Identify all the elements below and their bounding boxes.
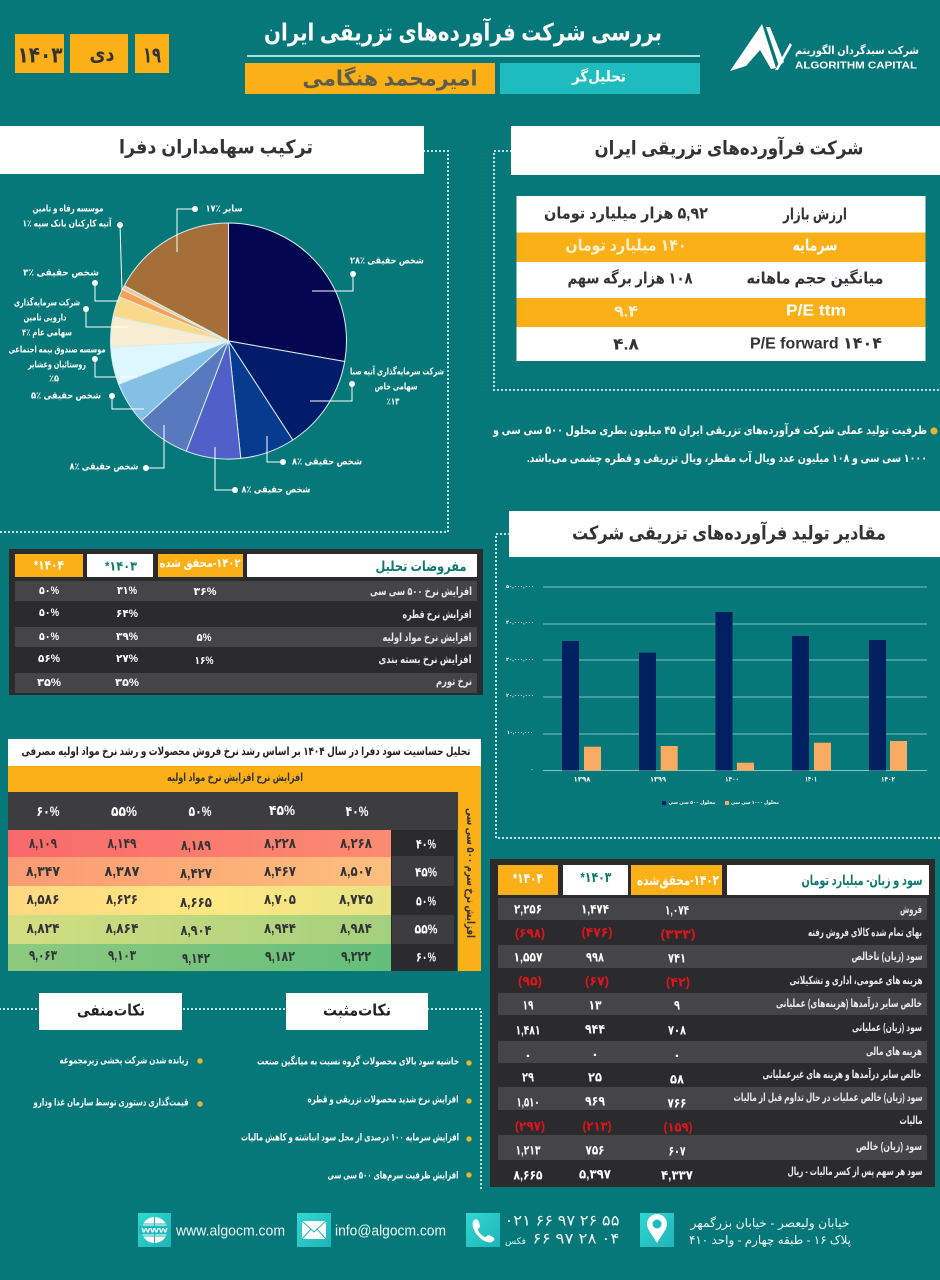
heat values: ۸,۳۴۷ (26, 863, 60, 879)
row: 500cc rate: ۳۱% (117, 585, 137, 597)
pie labels: شرکت سرمایه‌گذاری (14, 296, 80, 308)
row: other operating: ۱۳ (588, 998, 602, 1012)
row: finance costs: ۰ (591, 1046, 599, 1062)
bars: 1000cc solution (584, 741, 907, 770)
row: drops rate: ۶۴% (116, 608, 138, 620)
row: raw material rate: افزایش نرخ مواد اولیه (382, 632, 472, 644)
panel: company key figures: میانگین حجم ماهانه (746, 268, 884, 288)
row: raw material rate: ۳۹% (116, 631, 138, 643)
analyst name bar: تحلیل‌گر (571, 68, 626, 86)
heat values: ۸,۷۴۵ (339, 891, 373, 907)
heat values: ۸,۹۸۴ (340, 920, 372, 936)
heat values: ۸,۶۶۵ (180, 894, 212, 910)
panel: company key figures: P/E forward ۱۴۰۴ (750, 336, 882, 352)
panel: company key figures: ۱۰۸ هزار برگه سهم (568, 268, 693, 288)
row: finance costs: ۰ (673, 1048, 681, 1062)
footer: phone: ۶۶ ۹۷ ۲۸ ۰۴ (532, 1230, 620, 1248)
table: profit and loss: ۱۴۰۲-محقق‌شده (637, 872, 719, 889)
row: other non-operating: ۲۵ (588, 1070, 602, 1084)
panel: positive points: نکات‌مثبت (323, 1002, 391, 1020)
text block: production capacity: ۱۰۰۰ سی سی و ۱۰۸ میلیون عدد ویال آب مقطر، ویال تزریقی و قطره چشمی می‌باشد. (527, 451, 927, 466)
panel: company key figures: P/E ttm (786, 302, 846, 320)
row: cost of goods sold (515, 924, 922, 942)
row: tax: (۲۹۷) (515, 1118, 545, 1134)
row: earnings per share: ۸,۶۶۵ (514, 1168, 543, 1182)
row: earnings per share: ۴,۳۳۷ (661, 1168, 693, 1182)
footer: website: www.algocm.com (175, 1222, 285, 1240)
x axis labels: ۱۳۹۸ (574, 776, 591, 784)
footer: address: پلاک ۱۶ - طبقه چهارم - واحد ۴۱۰ (689, 1233, 851, 1248)
logo: ALGORITHM CAPITAL (795, 60, 917, 72)
table: profit and loss: *۱۴۰۳ (580, 869, 612, 885)
analyst name bar (245, 63, 700, 94)
table: sensitivity analysis (8, 739, 481, 971)
row: tax: (۱۵۹) (664, 1120, 692, 1134)
row: other non-operating (522, 1067, 922, 1086)
row: operating profit (516, 1022, 922, 1038)
legend (662, 800, 779, 806)
column headers: ۴۰% (346, 803, 369, 819)
row: gross profit: ۷۴۱ (668, 950, 686, 966)
row: other non-operating: ۵۸ (670, 1072, 684, 1086)
panel: positive points: حاشیه سود بالای محصولات گروه نسبت به میانگین صنعت (257, 1054, 459, 1068)
footer: phone: ۰۲۱ ۶۶ ۹۷ ۲۶ ۵۵ (504, 1212, 620, 1230)
row headers: ۴۵% (415, 864, 437, 880)
y axis labels: ۰ (530, 767, 534, 773)
x axis labels (574, 776, 896, 784)
row: drops rate: افزایش نرخ قطره (402, 609, 472, 621)
pie leader lines (83, 206, 356, 493)
heat values: ۸,۱۸۹ (181, 837, 211, 853)
heat values: ۸,۸۲۴ (26, 920, 60, 936)
row: cost of goods sold: (۳۳۳) (660, 926, 696, 942)
footer: phone (466, 1212, 620, 1248)
row: profit before tax: ۹۶۹ (585, 1094, 605, 1108)
column headers: ۵۵% (111, 803, 137, 819)
row: other operating (522, 996, 922, 1012)
legend: محلول ۵۰۰ سی سی (668, 800, 716, 806)
footer: address (640, 1213, 851, 1248)
row: net profit: ۱,۲۱۳ (516, 1142, 541, 1158)
heat values: ۹,۱۰۳ (108, 947, 136, 963)
heat values: ۹,۲۲۲ (341, 948, 371, 964)
row headers: ۴۰% (416, 836, 436, 852)
pie labels: شرکت سرمایه‌گذاری آتیه صبا (350, 364, 444, 378)
heat values: ۸,۱۴۹ (108, 835, 137, 851)
x axis labels: ۱۴۰۲ (881, 776, 896, 784)
heading: production chart (509, 511, 940, 557)
pie labels: سهامی عام ٪۴ (22, 328, 72, 338)
row: raw material rate: ۵% (196, 632, 212, 644)
row: packaging rate: افزایش نرخ بسته بندی (378, 654, 472, 666)
row: sales: فروش (900, 904, 922, 916)
date boxes: ۱۴۰۳ (18, 42, 63, 68)
row headers: ۵۰% (416, 894, 436, 908)
table: analysis assumptions: *۱۴۰۴ (34, 558, 64, 572)
heat values: ۸,۱۰۹ (29, 835, 57, 851)
text block: production capacity (492, 423, 938, 466)
row: tax (515, 1115, 922, 1134)
y axis labels: ۱۰,۰۰۰,۰۰۰ (507, 730, 533, 736)
row: tax: (۲۱۳) (582, 1118, 612, 1134)
heading: production chart: مقادیر تولید فرآورده‌های تزریقی شرکت (572, 520, 886, 544)
row: 500cc rate (39, 585, 472, 598)
panel: company key figures: ۵,۹۲ هزار میلیارد تومان (544, 206, 708, 222)
row: tax: مالیات (900, 1115, 922, 1127)
panel: negative points (33, 993, 203, 1108)
y axis labels: ۲۰,۰۰۰,۰۰۰ (506, 693, 534, 699)
row: 500cc rate: ۳۶% (194, 586, 217, 598)
table: analysis assumptions (9, 549, 483, 695)
row: raw material rate: ۵۰% (39, 631, 59, 643)
pie labels: ٪۱۳ (386, 396, 400, 408)
pie labels (8, 204, 444, 496)
row: packaging rate: ۲۷% (116, 653, 138, 665)
row: cost of goods sold: (۶۹۸) (515, 926, 545, 940)
heat values: ۸,۴۶۷ (264, 863, 296, 879)
pie labels: شخص حقیقی ٪۵ (31, 390, 101, 402)
row: finance costs (524, 1046, 922, 1062)
table: analysis assumptions: *۱۴۰۳ (105, 558, 137, 574)
row: earnings per share: ۵,۳۹۷ (579, 1166, 611, 1182)
row: earnings per share (514, 1166, 922, 1182)
footer: website (138, 1213, 285, 1247)
y axis labels (506, 584, 534, 773)
panel: company key figures: ۴.۸ (613, 336, 639, 354)
row: 500cc rate: افزایش نرخ ۵۰۰ سی سی (370, 586, 472, 598)
column headers: ۵۰% (188, 803, 212, 819)
panel: company key figures: ۹.۴ (614, 304, 638, 320)
heat values: ۸,۴۲۷ (180, 865, 212, 881)
pie labels: موسسه رفاه و تامین (32, 204, 104, 214)
footer: phone: فکس (505, 1236, 526, 1246)
panel: positive points (241, 993, 472, 1182)
column headers: ۶۰% (36, 803, 60, 819)
legend: محلول ۱۰۰۰ سی سی (731, 800, 779, 806)
row headers: ۵۵% (414, 922, 438, 936)
row: packaging rate: ۵۶% (38, 653, 60, 665)
heat values (26, 835, 373, 966)
pie labels: دارویی تامین (24, 312, 67, 324)
heat values: ۸,۲۲۸ (264, 835, 296, 851)
footer: email: info@algocm.com (335, 1222, 446, 1240)
panel: positive points: افزایش نرخ شدید محصولات تزریقی و قطره (308, 1094, 458, 1106)
footer: website: www (140, 1226, 169, 1234)
bar chart: production (506, 584, 927, 806)
table: analysis assumptions: مفروضات تحلیل (376, 558, 466, 575)
heat values: ۸,۳۸۷ (104, 863, 140, 879)
pie labels: شخص حقیقی ٪۳ (23, 268, 99, 278)
x axis labels: ۱۴۰۰ (725, 776, 739, 784)
pie labels: سهامی خاص (374, 382, 418, 392)
row: net profit (516, 1141, 922, 1158)
panel: company key figures (516, 196, 926, 361)
heat values: ۹,۱۴۲ (182, 950, 210, 966)
column headers (36, 802, 369, 819)
row: net profit: ۶۰۷ (668, 1144, 686, 1158)
row: finance costs: ۰ (524, 1048, 532, 1062)
heat values: ۸,۹۰۴ (180, 922, 212, 938)
row: inflation (37, 676, 472, 689)
row: raw material rate (39, 631, 472, 644)
panel: positive points: افزایش ظرفیت سرم‌های ۵۰۰ سی سی (328, 1170, 458, 1182)
table: analysis assumptions: ۱۴۰۲-محقق شده (160, 556, 241, 570)
row: sales (514, 902, 922, 918)
row: sales: ۱,۰۷۴ (665, 902, 689, 918)
row: profit before tax: ۷۶۶ (668, 1096, 686, 1110)
heading: shareholders (0, 126, 424, 174)
row: profit before tax (516, 1092, 922, 1110)
row: profit before tax: ۱,۵۱۰ (516, 1094, 540, 1110)
pie labels: شخص حقیقی ٪۲۸ (350, 256, 424, 266)
row: 500cc rate: ۵۰% (39, 585, 59, 597)
footer: address: خیابان ولیعصر - خیابان بزرگمهر (689, 1216, 850, 1231)
pie labels: شخص حقیقی ٪۸ (292, 456, 362, 468)
table: sensitivity analysis: تحلیل حساسیت سود دفرا در سال ۱۴۰۴ بر اساس رشد نرخ فروش محصولات و رشد نرخ مواد اولیه مصرفی (22, 746, 471, 759)
row: inflation: ۳۵% (37, 677, 61, 689)
row: sales: ۱,۴۷۴ (581, 902, 609, 916)
row: packaging rate: ۱۶% (194, 655, 214, 667)
heat values: ۸,۶۲۶ (106, 891, 138, 907)
heat values: ۹,۱۸۲ (265, 948, 295, 964)
heading: company: شرکت فرآورده‌های تزریقی ایران (594, 136, 864, 160)
row: gross profit: ۱,۵۵۷ (514, 950, 543, 964)
title: بررسی شرکت فرآورده‌های تزریقی ایران (264, 18, 662, 46)
row: other operating: ۱۹ (522, 998, 534, 1012)
y axis labels: ۵۰,۰۰۰,۰۰۰ (506, 584, 534, 590)
row: inflation: ۳۵% (115, 677, 139, 689)
y axis labels: ۴۰,۰۰۰,۰۰۰ (506, 620, 534, 626)
panel: company key figures: سرمایه (792, 238, 838, 254)
row: other operating: ۹ (674, 998, 680, 1012)
row: operating profit: ۱,۴۸۱ (516, 1022, 540, 1038)
heat values: ۸,۵۸۶ (26, 891, 60, 907)
heat values: ۸,۹۴۴ (264, 920, 296, 936)
row: other non-operating: ۲۹ (522, 1070, 534, 1084)
row: sales: ۲,۲۵۶ (514, 902, 542, 916)
pie labels: آتیه کارکنان بانک سپه ٪۱ (22, 216, 112, 230)
logo (730, 24, 919, 72)
pie chart: shareholders (111, 223, 346, 459)
column headers: ۴۵% (269, 802, 295, 818)
heat values: ۸,۵۰۷ (340, 863, 372, 879)
heading: shareholders: ترکیب سهامداران دفرا (119, 138, 313, 158)
row: admin expenses: (۹۵) (518, 974, 542, 988)
x axis labels: ۱۳۹۹ (650, 776, 667, 784)
analyst name bar: امیرمحمد هنگامی (302, 66, 478, 90)
panel: negative points: قیمت‌گذاری دستوری توسط سازمان غذا ودارو (33, 1096, 189, 1108)
panel: negative points: نکات‌منفی (77, 1002, 145, 1020)
pie labels: موسسه صندوق بیمه اجتماعی (8, 344, 106, 356)
table: sensitivity analysis: افزایش نرخ سرم ۵۰۰ سی سی (464, 808, 476, 938)
y axis labels: ۳۰,۰۰۰,۰۰۰ (506, 657, 534, 663)
pie labels: شخص حقیقی ٪۸ (242, 484, 310, 496)
row: gross profit (514, 950, 922, 966)
panel: company key figures: ۱۴۰ میلیارد تومان (566, 238, 686, 254)
row: admin expenses (518, 974, 922, 990)
row: operating profit: ۹۴۴ (585, 1022, 605, 1036)
table: profit and loss (490, 859, 935, 1187)
date boxes: دی (90, 44, 114, 66)
pie labels: شخص حقیقی ٪۸ (70, 462, 138, 472)
heading: company (511, 126, 940, 175)
row: admin expenses: (۴۲) (666, 974, 690, 990)
panel: company key figures: ارزش بازار (782, 206, 847, 224)
row: operating profit: ۷۰۸ (668, 1022, 686, 1038)
row: drops rate (39, 607, 472, 621)
panel: positive points: افزایش سرمایه ۱۰۰ درصدی از محل سود انباشته و کاهش مالیات (241, 1132, 459, 1144)
table: profit and loss: *۱۴۰۴ (513, 870, 543, 886)
date boxes (15, 34, 169, 73)
row: inflation: نرخ تورم (436, 676, 472, 688)
pie labels: روستائیان وعشایر (27, 360, 86, 370)
row: drops rate: ۵۰% (39, 607, 59, 619)
footer: email (297, 1213, 446, 1247)
row headers: ۶۰% (416, 950, 436, 964)
date boxes: ۱۹ (143, 42, 161, 68)
heat values: ۸,۸۶۴ (106, 920, 139, 936)
pie labels: سایر ٪۱۷ (206, 204, 242, 214)
row headers (414, 836, 438, 964)
heat values: ۸,۷۰۵ (264, 891, 296, 907)
pie labels: ٪۵ (49, 374, 59, 384)
table: sensitivity analysis: افزایش نرخ افزایش نرخ مواد اولیه (167, 772, 303, 784)
row: cost of goods sold: (۴۷۶) (582, 924, 612, 940)
x axis labels: ۱۴۰۱ (805, 776, 817, 784)
row: admin expenses: (۶۷) (585, 974, 609, 988)
row: gross profit: ۹۹۸ (586, 950, 604, 964)
heat values: ۹,۰۶۳ (29, 947, 57, 963)
heat values: ۸,۲۶۸ (340, 835, 372, 851)
panel: negative points: زیانده شدن شرکت پخشی زیرمجموعه (60, 1056, 189, 1066)
row: packaging rate (38, 653, 472, 667)
row: net profit: ۷۵۶ (586, 1142, 604, 1158)
bars: 500cc solution (562, 612, 886, 770)
logo: شرکت سبدگردان الگوریتم (795, 44, 919, 57)
